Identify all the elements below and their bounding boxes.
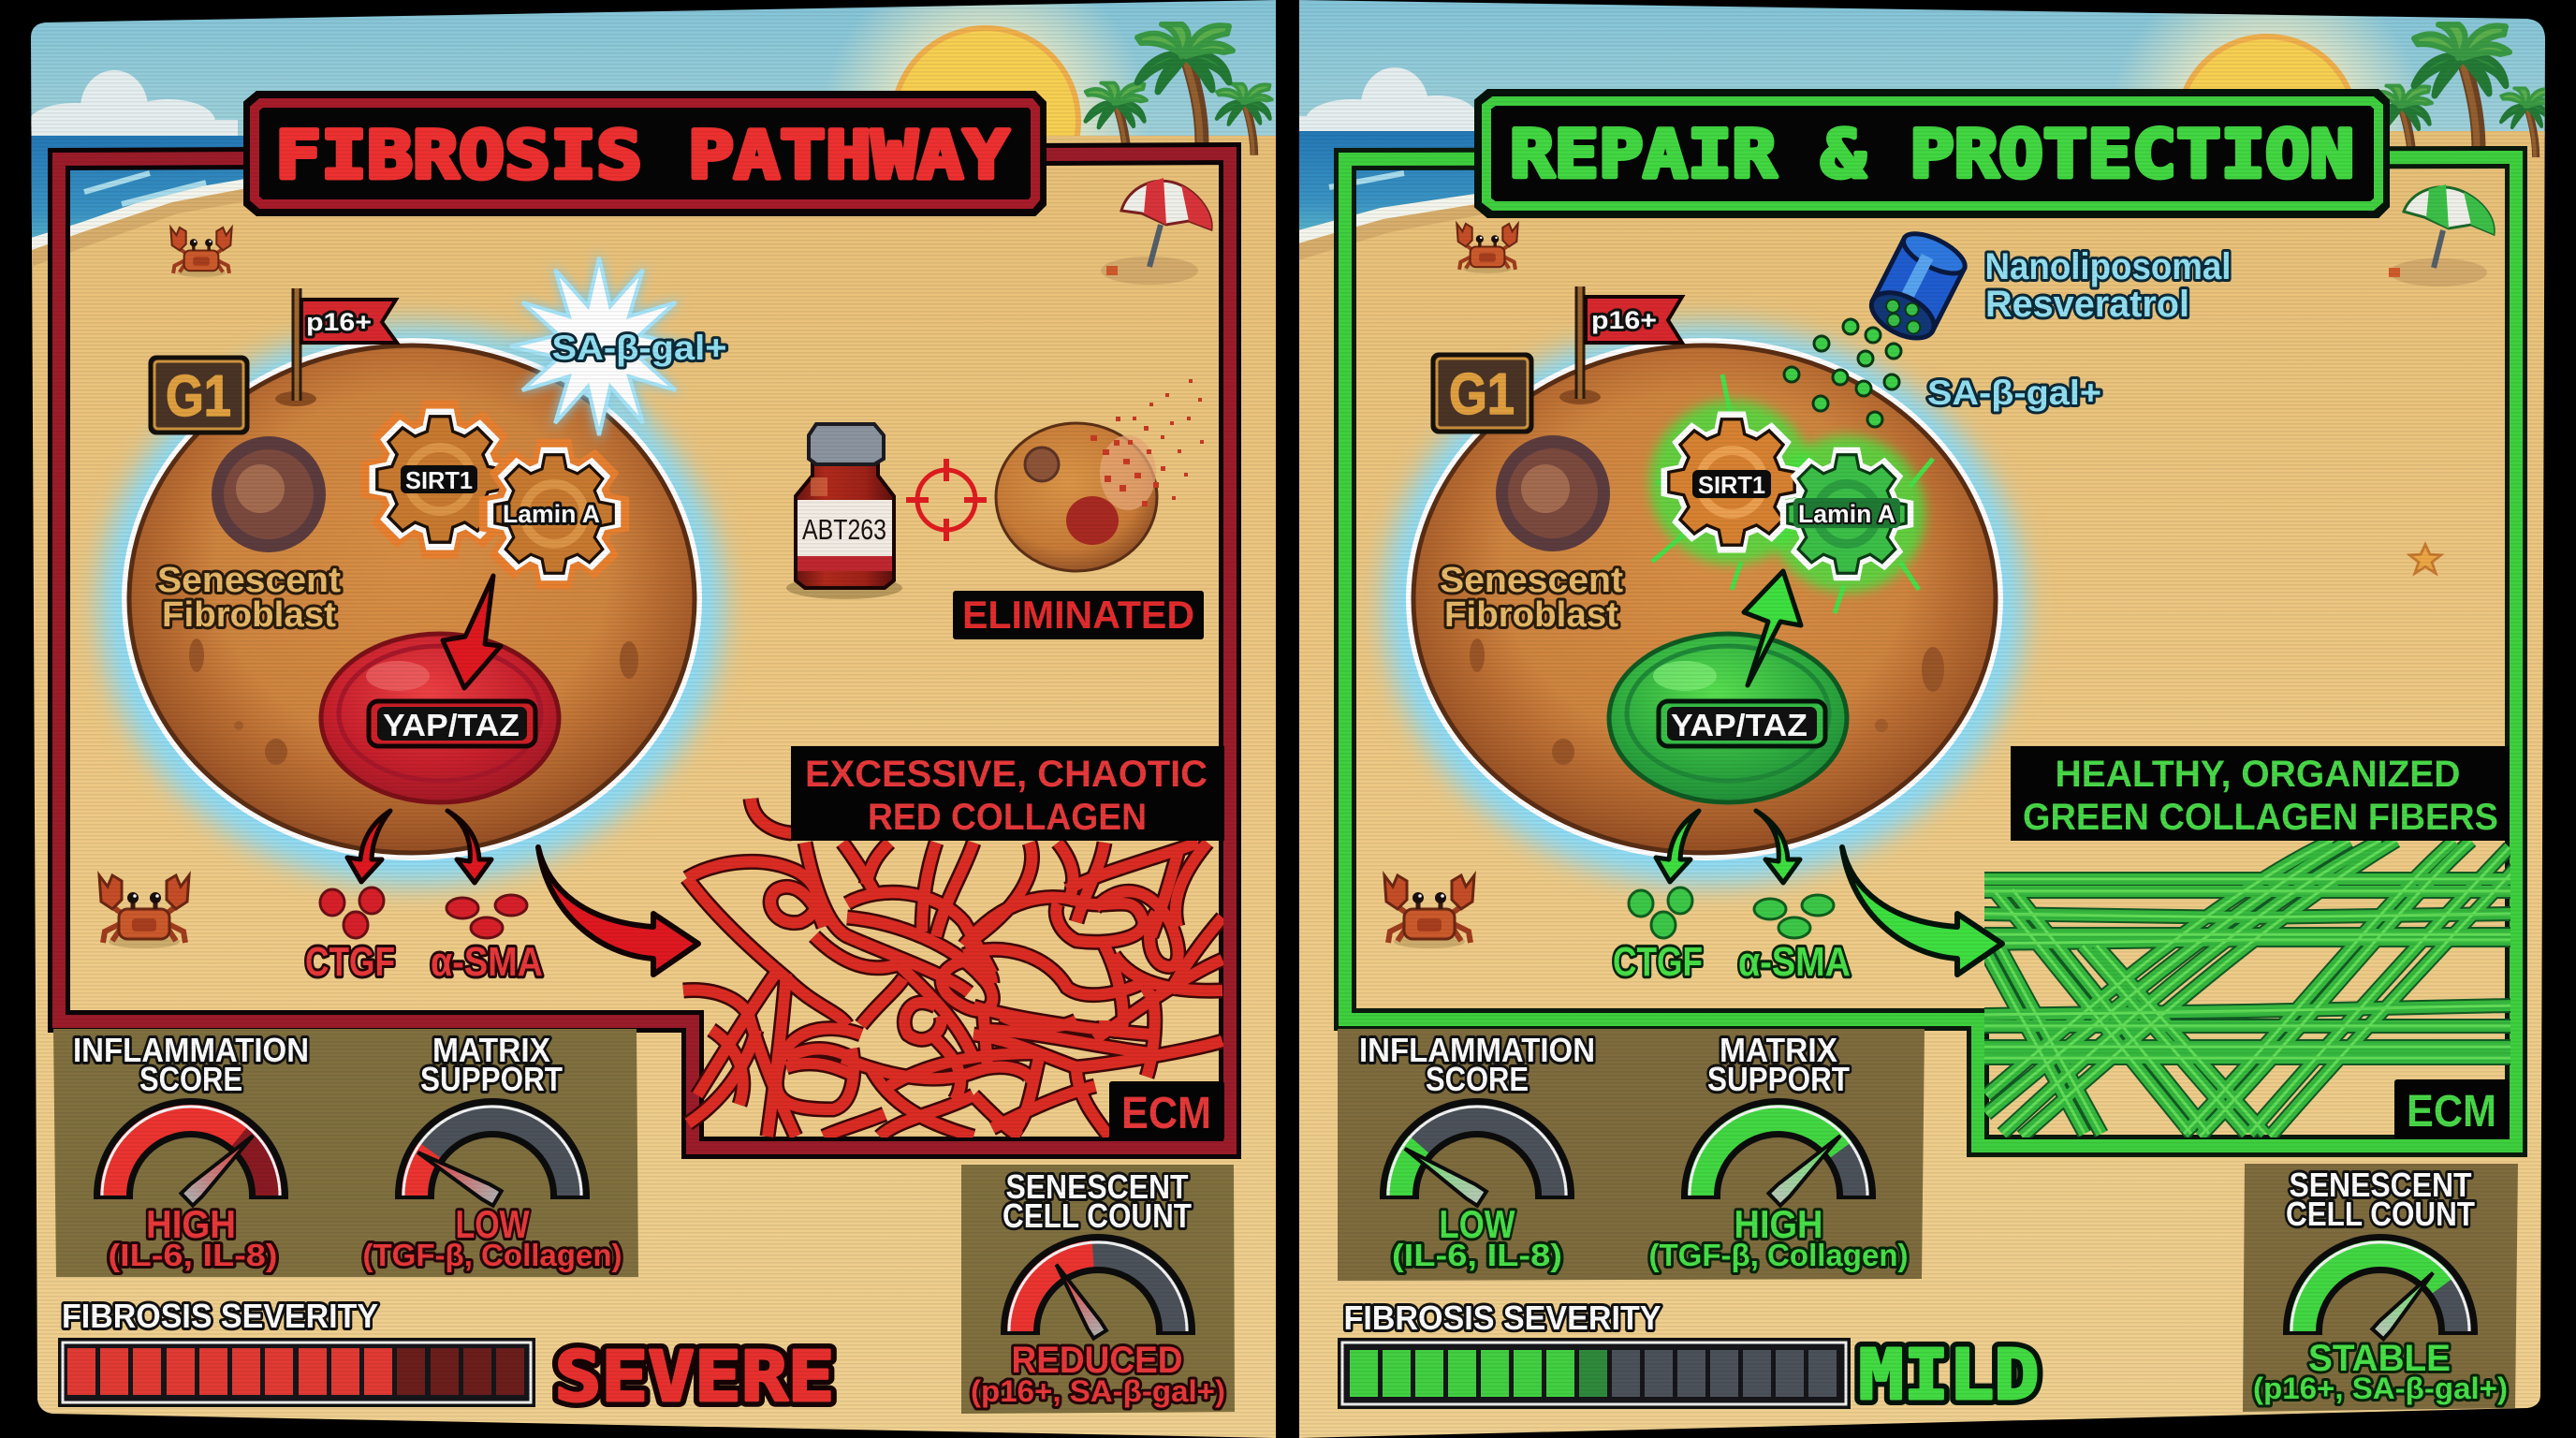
value: severe: SEVERE xyxy=(554,1337,835,1417)
icon: green beach umbrella xyxy=(2389,184,2494,286)
badge: G1 right: G1 xyxy=(1449,362,1515,427)
value: high right: HIGH xyxy=(1734,1202,1823,1246)
label: senescent cell count: CELL COUNT xyxy=(1003,1196,1192,1235)
icon: crab lower xyxy=(99,875,189,948)
label: excessive chaotic red collagen: RED COLLAGEN xyxy=(868,797,1147,838)
value: stable: STABLE xyxy=(2308,1338,2451,1379)
label: senescent fibroblast: Fibroblast xyxy=(162,595,336,635)
gears: SIRT1 and Lamin A xyxy=(369,408,622,581)
arrow: to alpha-SMA right xyxy=(1756,811,1800,883)
badge: G1: G1 xyxy=(166,364,231,429)
value: high: HIGH xyxy=(146,1202,236,1246)
label: inflammation score: INFLAMMATION xyxy=(73,1031,309,1069)
icon: starfish xyxy=(2409,545,2441,573)
label: nanoliposomal resveratrol: Nanoliposomal xyxy=(1984,246,2232,287)
label: inflammation score right: SCORE xyxy=(1426,1060,1529,1098)
panel: inflammation and matrix gauges right xyxy=(1338,1029,1925,1281)
organelle: nucleus xyxy=(212,436,326,552)
value: low: LOW xyxy=(455,1202,530,1246)
label: senescent fibroblast right: Senescent xyxy=(1440,561,1623,600)
arrow: gears to YAP/TAZ xyxy=(443,576,501,688)
panel: right screen repair and protection xyxy=(1292,0,2555,1438)
icon: crosshair xyxy=(906,459,987,541)
value: reduced: (p16+, SA-β-gal+) xyxy=(971,1374,1225,1408)
value: reduced: REDUCED xyxy=(1011,1340,1183,1381)
label: healthy organized green collagen fibers xyxy=(2011,746,2510,841)
heading: fibrosis pathway: FIBROSIS PATHWAY xyxy=(275,117,1009,194)
icon: bottle ABT263: ABT263 xyxy=(802,513,886,546)
panel: senescent cell count right xyxy=(2243,1164,2518,1412)
label: inflammation score: SCORE xyxy=(139,1060,242,1098)
chart: chaotic red collagen ECM xyxy=(683,799,1222,1137)
label: senescent fibroblast xyxy=(157,561,341,635)
label: CTGF: CTGF xyxy=(305,939,395,985)
icon: eliminated cell dispersing xyxy=(996,379,1204,571)
label: matrix support right: MATRIX xyxy=(1720,1031,1837,1069)
label: fibrosis severity right: FIBROSIS SEVERITY xyxy=(1344,1299,1661,1337)
icon: crab lower right xyxy=(1384,875,1474,948)
arrow: YAP/TAZ up to gears xyxy=(1744,571,1801,685)
panel frame: fibrosis xyxy=(59,154,1230,1148)
gears: activated SIRT1 and Lamin A xyxy=(1649,374,1933,613)
label: eliminated: ELIMINATED xyxy=(962,593,1194,637)
panel: left screen fibrosis pathway xyxy=(0,0,1282,1438)
beach background right xyxy=(1292,0,2555,1438)
badge: G1 xyxy=(151,358,247,433)
label: ECM right: ECM xyxy=(2407,1087,2496,1137)
icon: palm trees xyxy=(1086,24,1272,161)
gear: SIRT1 xyxy=(369,408,511,550)
gauge: inflammation low xyxy=(1388,1107,1566,1206)
label: healthy organized green collagen fibers: HEALTHY, ORGANIZED xyxy=(2056,754,2460,795)
label: senescent cell count right xyxy=(2286,1166,2475,1233)
value: stable xyxy=(2253,1338,2508,1405)
icon: CTGF dots xyxy=(320,888,384,938)
arrow: to ECM right xyxy=(1842,847,2002,975)
bar: mild severity meter xyxy=(1338,1338,1851,1409)
value: low xyxy=(363,1202,622,1272)
organelle: red YAP/TAZ: YAP/TAZ xyxy=(383,708,520,742)
icon: CTGF dots right xyxy=(1629,888,1692,938)
heading: repair and protection: REPAIR & PROTECTION xyxy=(1510,116,2354,193)
label: inflammation score xyxy=(73,1031,309,1098)
value: high right xyxy=(1649,1202,1908,1272)
value: stable: (p16+, SA-β-gal+) xyxy=(2253,1372,2508,1405)
arrow: to ECM xyxy=(538,847,698,975)
label: healthy organized green collagen fibers: GREEN COLLAGEN FIBERS xyxy=(2023,797,2498,838)
arrow: to alpha-SMA xyxy=(447,811,491,883)
label: senescent cell count right: CELL COUNT xyxy=(2286,1195,2475,1233)
gear: Lamin A right: Lamin A xyxy=(1798,500,1895,528)
flag: p16+ right: p16+ xyxy=(1591,306,1657,334)
label: nanoliposomal resveratrol xyxy=(1984,246,2232,325)
value: high: (IL-6, IL-8) xyxy=(109,1238,277,1272)
label: CTGF right: CTGF xyxy=(1613,939,1703,985)
icon: bottle ABT263 xyxy=(786,424,902,599)
label: excessive chaotic red collagen: EXCESSIVE, CHAOTIC xyxy=(805,754,1208,795)
value: high xyxy=(109,1202,277,1272)
gear: SIRT1: SIRT1 xyxy=(405,466,473,494)
panel: senescent cell count xyxy=(961,1165,1235,1414)
label: senescent fibroblast right xyxy=(1440,561,1623,635)
label: inflammation score right: INFLAMMATION xyxy=(1359,1031,1595,1069)
icon: alpha-SMA dots xyxy=(446,895,527,938)
label: ECM: ECM xyxy=(1121,1089,1211,1138)
organelle: green YAP/TAZ: YAP/TAZ xyxy=(1671,708,1808,742)
gear: Lamin A xyxy=(487,447,622,581)
arrow: to CTGF xyxy=(347,811,390,882)
cell: senescent fibroblast right xyxy=(1383,324,2026,886)
organelle: red YAP/TAZ xyxy=(321,634,559,802)
gauge: inflammation high xyxy=(102,1107,280,1206)
badge: G1 right xyxy=(1433,355,1531,432)
value: low right: (IL-6, IL-8) xyxy=(1392,1238,1562,1272)
label: excessive chaotic red collagen xyxy=(791,746,1224,841)
beach background xyxy=(0,0,1282,1438)
label: matrix support: SUPPORT xyxy=(420,1060,563,1098)
panel frame: repair xyxy=(1345,157,2516,1146)
label: senescent fibroblast: Senescent xyxy=(157,561,341,600)
bar: severity meter xyxy=(58,1338,535,1407)
value: low right xyxy=(1392,1202,1562,1272)
label: senescent fibroblast right: Fibroblast xyxy=(1444,595,1618,635)
icon: crab upper right xyxy=(1456,224,1518,273)
value: mild: MILD xyxy=(1859,1335,2039,1416)
icon: nanoliposomal capsule xyxy=(1865,226,1970,347)
organelle: nucleus right xyxy=(1496,435,1610,551)
gear: Lamin A: Lamin A xyxy=(503,500,600,528)
arrow: to CTGF right xyxy=(1656,811,1699,882)
gauge: matrix low xyxy=(403,1107,581,1206)
value: reduced xyxy=(971,1340,1225,1408)
organelle: green YAP/TAZ xyxy=(1609,634,1847,802)
starburst: SA-beta-gal+: SA-β-gal+ xyxy=(552,329,726,367)
label: senescent cell count: SENESCENT xyxy=(1005,1167,1189,1206)
icon: crab upper xyxy=(170,227,232,277)
panel: inflammation and matrix gauges xyxy=(53,1029,638,1277)
label: inflammation score right xyxy=(1359,1031,1595,1098)
gauge: matrix high xyxy=(1690,1107,1867,1206)
flag: p16+ xyxy=(275,288,397,406)
icon: red beach umbrella xyxy=(1101,178,1211,285)
icon: alpha-SMA dots right xyxy=(1754,895,1834,938)
heading: fibrosis pathway xyxy=(246,94,1044,213)
icon: palm trees right xyxy=(2371,24,2553,164)
gear: Lamin A right xyxy=(1784,451,1910,577)
flag: p16+ right xyxy=(1559,286,1682,404)
chart: organized green collagen ECM xyxy=(1984,841,2518,1137)
label: alpha-SMA right: α-SMA xyxy=(1738,939,1851,985)
gauge: reduced xyxy=(1009,1242,1187,1339)
label: fibrosis severity: FIBROSIS SEVERITY xyxy=(62,1297,378,1335)
label: matrix support right: SUPPORT xyxy=(1707,1060,1850,1098)
value: severe: SEVERE xyxy=(554,1337,835,1417)
label: senescent cell count right: SENESCENT xyxy=(2290,1166,2472,1204)
label: nanoliposomal resveratrol: Resveratrol xyxy=(1985,284,2189,325)
starburst: SA-beta-gal+ xyxy=(503,250,726,443)
icon: green resveratrol particles xyxy=(1784,319,1901,427)
value: low: (TGF-β, Collagen) xyxy=(363,1238,622,1272)
value: high right: (TGF-β, Collagen) xyxy=(1649,1238,1908,1272)
heading: repair and protection xyxy=(1477,92,2387,215)
flag: p16+: p16+ xyxy=(306,308,372,336)
label: SA-beta-gal+ right: SA-β-gal+ xyxy=(1927,374,2101,412)
label: matrix support: MATRIX xyxy=(432,1031,550,1069)
gauge: stable xyxy=(2291,1242,2469,1339)
value: mild: MILD xyxy=(1859,1335,2039,1416)
gear: SIRT1 right: SIRT1 xyxy=(1698,471,1765,499)
cell: senescent fibroblast xyxy=(99,324,724,886)
label: matrix support xyxy=(420,1031,563,1098)
label: alpha-SMA: α-SMA xyxy=(431,939,543,985)
label: senescent cell count xyxy=(1003,1167,1192,1235)
label: matrix support right xyxy=(1707,1031,1850,1098)
gear: SIRT1 right xyxy=(1665,416,1798,549)
value: low right: LOW xyxy=(1440,1202,1515,1246)
